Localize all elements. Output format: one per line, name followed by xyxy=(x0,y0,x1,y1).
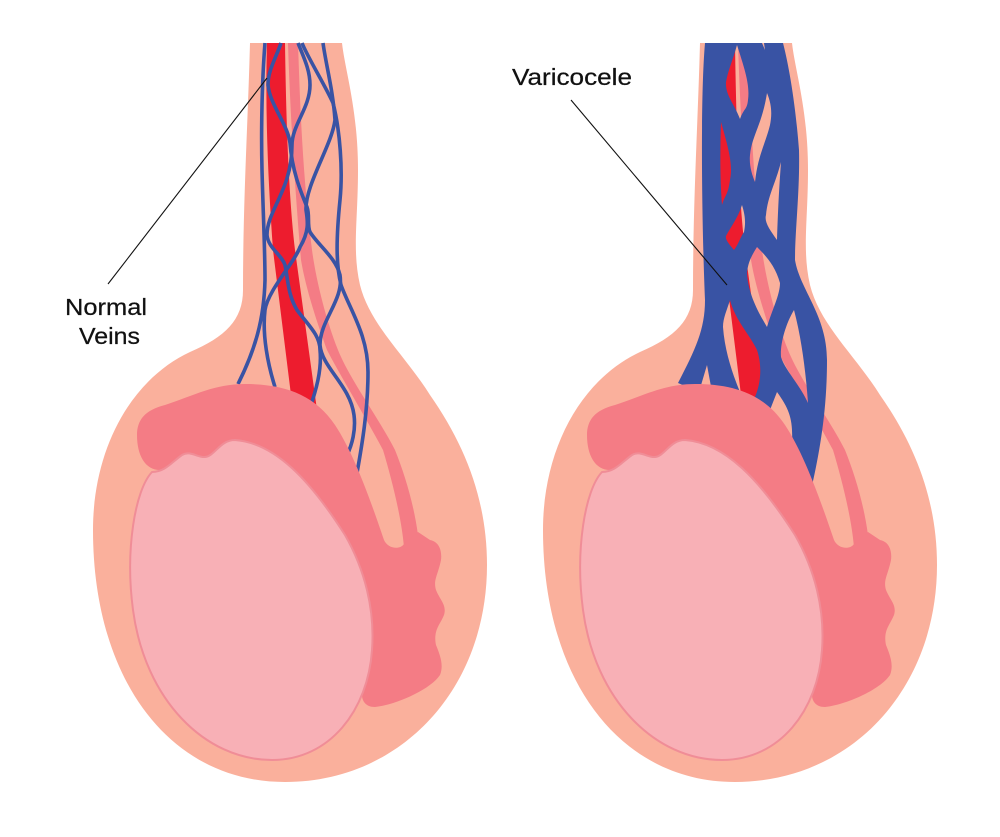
skin outline xyxy=(543,43,937,782)
vas deferens xyxy=(738,43,868,548)
skin outline xyxy=(93,43,487,782)
artery xyxy=(716,43,767,410)
swollen veins xyxy=(678,43,827,486)
epididymis xyxy=(137,384,445,707)
vas deferens xyxy=(288,43,418,548)
callout: normal veins: Veins xyxy=(79,323,140,349)
epididymis xyxy=(587,384,895,707)
artery xyxy=(266,43,317,410)
callout: varicocele: Varicocele xyxy=(512,64,632,90)
testis xyxy=(130,440,373,760)
epididymis and testis, right xyxy=(580,384,895,760)
epididymis and testis, left xyxy=(130,384,445,760)
testis xyxy=(580,440,823,760)
figure: normal veins xyxy=(93,43,487,782)
callout: varicocele xyxy=(512,64,727,285)
callout: normal veins: Normal xyxy=(65,294,147,320)
callout: normal veins xyxy=(65,78,267,349)
figure: varicocele xyxy=(543,43,937,782)
normal veins network xyxy=(238,43,368,473)
